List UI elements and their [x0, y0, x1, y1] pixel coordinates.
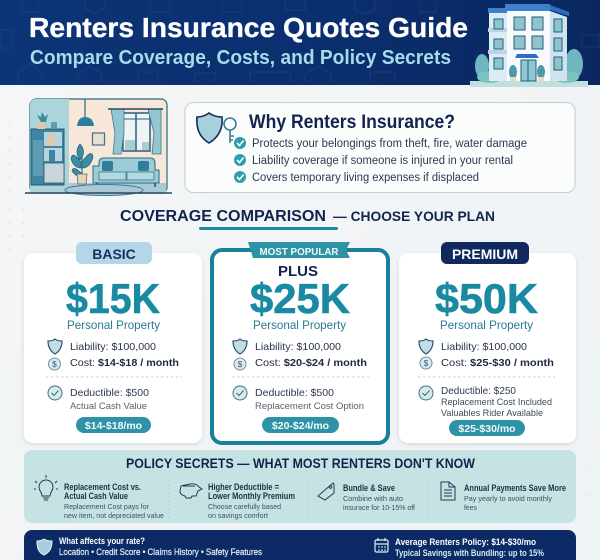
plan name: plus: PLUS — [278, 263, 318, 280]
footer bar — [24, 530, 576, 560]
price pill — [262, 417, 339, 433]
panel: plus plan — [212, 242, 388, 443]
banner: most popular — [248, 242, 350, 258]
checklist item 3: Covers temporary living expenses if displaced — [252, 172, 479, 184]
secret: annual payments: Annual Payments Save More — [464, 483, 566, 493]
label: personal property: Personal Property — [253, 318, 346, 332]
icon: check circle — [233, 386, 247, 400]
liability text: Liability: $100,000 — [441, 341, 527, 353]
badge: basic: BASIC — [92, 246, 136, 262]
rate factors text: Location • Credit Score • Claims History • Safety Features — [59, 547, 262, 557]
secret: bundle and save — [343, 483, 416, 512]
secret: replacement cost — [64, 482, 164, 520]
rate factors text: What affects your rate? — [59, 536, 145, 546]
secret: annual payments — [464, 483, 566, 512]
icon: shield — [233, 339, 247, 354]
icon: dollar: $ — [424, 359, 429, 368]
secret: higher deductible: Higher Deductible = — [208, 482, 279, 492]
badge: basic — [76, 242, 152, 264]
title: Renters Insurance Quotes Guide — [29, 12, 468, 43]
deductible text: Deductible: $500 — [70, 387, 149, 399]
liability text: Liability: $100,000 — [255, 341, 341, 353]
icon: dollar — [420, 357, 432, 369]
heading: why renters insurance: Why Renters Insurance? — [249, 112, 455, 133]
panel: basic plan — [24, 242, 202, 443]
coverage amount: $15K: $15K — [66, 275, 160, 322]
price pill: $14-$18/mo — [85, 420, 142, 432]
icon: document — [441, 482, 455, 500]
header banner — [0, 0, 600, 87]
liability text: Liability: $100,000 — [70, 341, 156, 353]
secret: higher deductible: Choose carefully based — [208, 502, 281, 511]
secret: annual payments: fees — [464, 503, 477, 512]
subtitle: Compare Coverage, Costs, and Policy Secrets — [30, 47, 451, 69]
label: personal property: Personal Property — [67, 318, 160, 332]
value type text: Replacement Cost Option — [255, 401, 364, 412]
checklist item 2: Liability coverage if someone is injured in your rental — [252, 155, 513, 167]
icon: dollar — [48, 358, 60, 370]
secret: annual payments: Pay yearly to avoid monthly — [464, 494, 552, 503]
replacement cost text: Replacement Cost Included — [441, 397, 552, 408]
icon: check circle — [419, 386, 433, 400]
icon: dollar — [234, 358, 246, 370]
banner: most popular: MOST POPULAR — [260, 247, 339, 258]
price pill: $25-$30/mo — [458, 423, 516, 435]
icon: shield — [37, 539, 52, 555]
secret: higher deductible: on savings comfort — [208, 511, 269, 520]
cost text: Cost: $14-$18 / month — [70, 357, 179, 369]
section heading: coverage comparison: COVERAGE COMPARISON — [120, 208, 326, 225]
section heading: coverage comparison — [120, 208, 495, 230]
average policy text: Average Renters Policy: $14-$30/mo — [395, 537, 536, 547]
icon: shield — [197, 113, 222, 143]
badge: premium: PREMIUM — [452, 246, 518, 262]
icon: check circle — [48, 386, 62, 400]
price pill — [76, 417, 151, 433]
panel: policy secrets — [24, 450, 576, 523]
icon: key — [224, 118, 236, 143]
secret: replacement cost: Actual Cash Value — [64, 491, 128, 501]
icon: dollar: $ — [238, 360, 243, 369]
rate factors text — [59, 536, 262, 557]
icon: dollar: $ — [52, 360, 57, 369]
value type text: Actual Cash Value — [70, 401, 147, 412]
panel: premium plan — [399, 242, 576, 443]
secret: higher deductible: Lower Monthly Premium — [208, 491, 295, 501]
icon: shield — [48, 339, 62, 354]
price pill — [449, 420, 525, 436]
section heading: coverage comparison: — CHOOSE YOUR PLAN — [333, 208, 495, 224]
cost text: Cost: $25-$30 / month — [441, 357, 554, 369]
deductible text: Deductible: $250 — [441, 385, 516, 397]
illustration: living room — [25, 99, 172, 196]
cost text: Cost: $20-$24 / month — [255, 357, 367, 369]
label: personal property: Personal Property — [440, 318, 533, 332]
secret: bundle and save: Combine with auto — [343, 494, 403, 503]
badge: premium — [441, 242, 529, 264]
secret: replacement cost: Replacement Cost pays for — [64, 502, 149, 511]
coverage amount: $25K: $25K — [250, 275, 350, 322]
icon: shield — [419, 339, 433, 354]
icon: lightbulb — [34, 475, 58, 500]
panel: why renters insurance — [185, 102, 575, 192]
checklist item 1: Protects your belongings from theft, fire, water damage — [252, 138, 527, 150]
icon: apartment building — [470, 4, 588, 87]
icon: calendar — [375, 538, 388, 552]
icon: piggy bank — [180, 484, 202, 498]
secret: replacement cost: Replacement Cost vs. — [64, 482, 141, 492]
secret: bundle and save: Bundle & Save — [343, 483, 395, 493]
deductible text: Deductible: $500 — [255, 387, 334, 399]
secret: higher deductible — [208, 482, 295, 520]
average policy text — [395, 537, 544, 558]
price pill: $20-$24/mo — [272, 420, 329, 432]
icon: price tag — [318, 483, 334, 500]
heading: policy secrets: POLICY SECRETS — WHAT MOST RENTERS DON'T KNOW — [126, 455, 476, 471]
secret: replacement cost: new item, not depreciated value — [64, 511, 164, 520]
average policy text: Typical Savings with Bundling: up to 15% — [395, 548, 544, 558]
coverage amount: $50K: $50K — [435, 275, 538, 322]
secret: bundle and save: insurace for 10-15% off — [343, 503, 416, 512]
valuables rider text: Valuables Rider Available — [441, 408, 543, 419]
